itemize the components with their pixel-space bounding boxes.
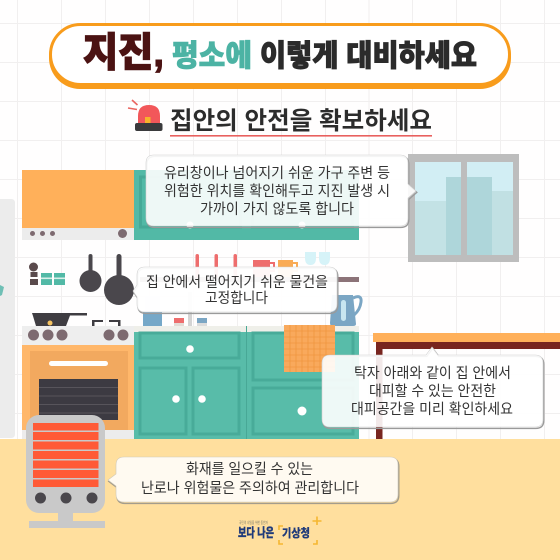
callout: windows and furniture: 유리창이나 넘어지기 쉬운 가구 주변 등 bbox=[164, 165, 390, 182]
callout: secure objects bbox=[133, 267, 338, 313]
heater bbox=[26, 415, 105, 528]
kettle bbox=[330, 295, 361, 326]
logo: 국민의 내일을 위한 동반자 bbox=[239, 519, 268, 525]
countertop items bbox=[143, 292, 207, 326]
logo bbox=[238, 516, 322, 544]
upper teal cabinets bbox=[134, 170, 359, 240]
stove top with frying pan bbox=[22, 313, 135, 345]
callout: heater and hazards bbox=[108, 457, 399, 503]
logo: 보다 나은 bbox=[238, 525, 274, 540]
callout: safe shelter under table bbox=[322, 347, 544, 428]
logo: 기상청 bbox=[282, 526, 310, 540]
callout: safe shelter under table: 대피할 수 있는 안전한 bbox=[369, 383, 496, 400]
title banner: 이렇게 대비하세요 bbox=[260, 40, 477, 73]
refrigerator edge bbox=[0, 199, 15, 438]
callout: windows and furniture: 위험한 위치를 확인해두고 지진 발생 시 bbox=[164, 183, 390, 200]
callout: windows and furniture: 가까이 가지 않도록 합니다 bbox=[200, 201, 354, 218]
callout: heater and hazards: 난로나 위험물은 주의하여 관리합니다 bbox=[141, 480, 359, 497]
callout: secure objects: 고정합니다 bbox=[205, 290, 268, 307]
shelf: pepper mill and jars bbox=[29, 262, 65, 285]
window bbox=[408, 154, 519, 262]
upper cabinet: range hood bbox=[22, 170, 134, 240]
callout: windows and furniture bbox=[146, 155, 417, 227]
title banner bbox=[49, 24, 511, 89]
callout: safe shelter under table: 탁자 아래와 같이 집 안에서 bbox=[354, 365, 511, 382]
hanging pans bbox=[80, 254, 134, 305]
oven bbox=[22, 345, 134, 439]
table bbox=[373, 333, 560, 439]
subtitle: 집안의 안전을 확보하세요 bbox=[170, 107, 432, 135]
callout: secure objects: 집 안에서 떨어지기 쉬운 물건을 bbox=[146, 274, 328, 291]
mugs bbox=[253, 252, 330, 277]
counter and lower teal cabinets bbox=[134, 326, 359, 439]
title banner: 평소에 bbox=[172, 40, 252, 73]
callout: safe shelter under table: 대피공간을 미리 확인하세요 bbox=[351, 401, 513, 418]
floor bbox=[0, 439, 560, 560]
plaid towel bbox=[284, 325, 335, 372]
callout: heater and hazards: 화재를 일으킬 수 있는 bbox=[186, 461, 313, 478]
title banner: 지진, bbox=[83, 31, 164, 75]
icon: siren bbox=[128, 100, 162, 131]
hanging utensils and rail bbox=[140, 254, 359, 282]
